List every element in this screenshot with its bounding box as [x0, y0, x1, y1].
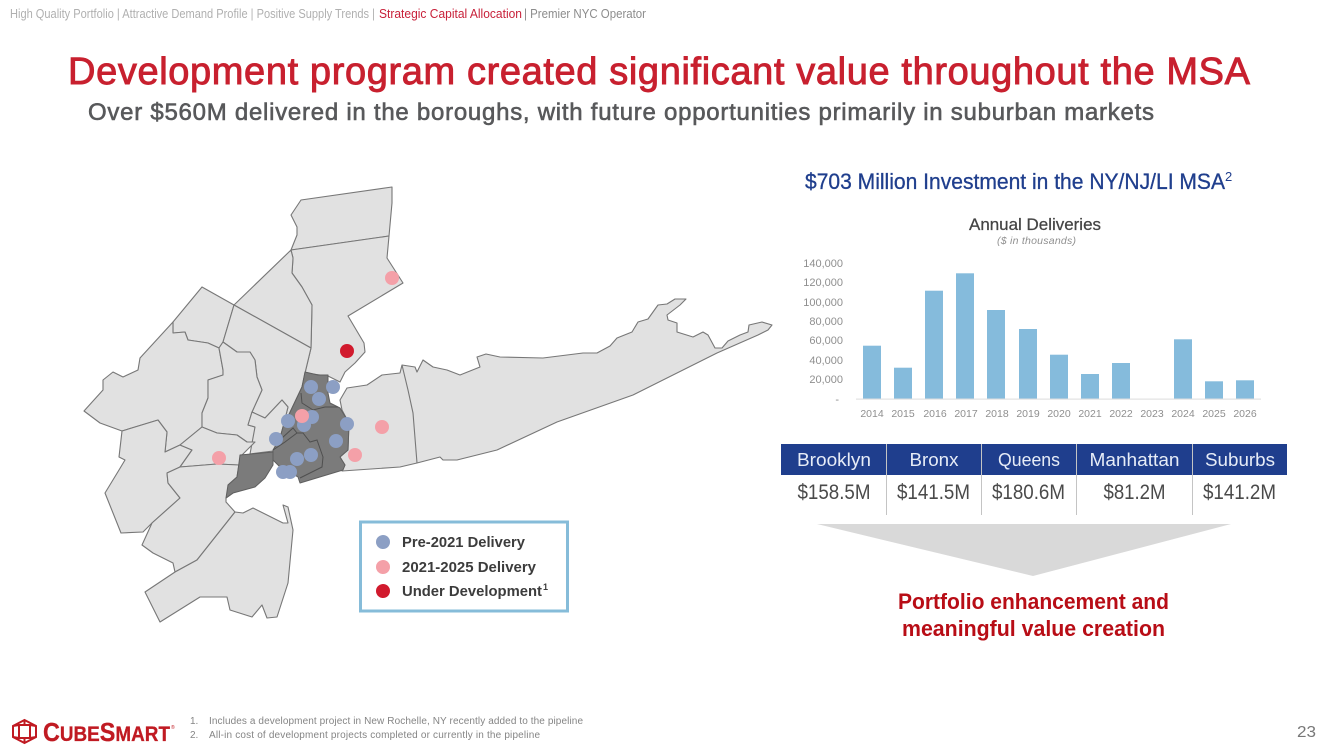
borough investment table: $141.5M: [897, 481, 970, 504]
footnotes: All-in cost of development projects completed or currently in the pipeline: [209, 730, 540, 741]
bar chart: annual deliveries: 2014: [860, 408, 884, 420]
borough investment table: [781, 444, 1287, 515]
legend: Pre-2021 Delivery: [402, 535, 525, 551]
map: 2021-2025 delivery markers: [212, 271, 399, 465]
conclusion callout: [898, 589, 1169, 641]
conclusion callout: Portfolio enhancement and: [898, 589, 1169, 614]
map: pre-2021 delivery markers: [269, 380, 354, 479]
header navigation: High Quality Portfolio | Attractive Demand Profile | Positive Supply Trends |: [10, 7, 375, 21]
subtitle: Over $560M delivered in the boroughs, with future opportunities primarily in suburban markets: [88, 99, 1154, 126]
investment heading: 2: [1225, 169, 1232, 184]
bar chart: annual deliveries: 2019: [1016, 408, 1040, 420]
bar chart: annual deliveries: 2017: [954, 408, 978, 420]
title: Development program created significant value throughout the MSA: [68, 51, 1251, 93]
footnotes: Includes a development project in New Rochelle, NY recently added to the pipeline: [209, 716, 583, 727]
chart title: ($ in thousands): [997, 235, 1076, 247]
bar chart: annual deliveries: 2016: [923, 408, 947, 420]
footnotes: [190, 716, 583, 741]
footnotes: 1.: [190, 716, 198, 727]
bar chart: annual deliveries: 2018: [985, 408, 1009, 420]
borough investment table: Manhattan: [1090, 450, 1180, 470]
borough investment table: Suburbs: [1205, 450, 1275, 470]
logo: CubeSmart: ®: [171, 724, 175, 731]
bar chart: annual deliveries: 80,000: [809, 316, 843, 328]
footnotes: 2.: [190, 730, 198, 741]
bar chart: annual deliveries: 2023: [1140, 408, 1164, 420]
header navigation: Strategic Capital Allocation: [379, 7, 522, 21]
bar chart: annual deliveries: 2022: [1109, 408, 1133, 420]
map: under development marker: [340, 344, 354, 358]
conclusion callout: meaningful value creation: [902, 616, 1165, 641]
chart title: [969, 216, 1101, 247]
bar chart: annual deliveries: -: [835, 394, 839, 406]
bar chart: annual deliveries: 20,000: [809, 374, 843, 386]
borough investment table: $141.2M: [1203, 481, 1276, 504]
bar chart: annual deliveries: 2015: [891, 408, 915, 420]
borough investment table: $180.6M: [992, 481, 1065, 504]
legend: Under Development: [402, 584, 542, 600]
borough investment table: Bronx: [910, 450, 958, 470]
bar chart: annual deliveries: 2026: [1233, 408, 1257, 420]
chart title: Annual Deliveries: [969, 216, 1101, 234]
legend: 1: [543, 582, 548, 592]
bar chart: annual deliveries: 60,000: [809, 335, 843, 347]
bar chart: annual deliveries: 2025: [1202, 408, 1226, 420]
borough investment table: $158.5M: [798, 481, 870, 504]
bar chart: annual deliveries: 140,000: [803, 258, 843, 270]
bar chart: annual deliveries: 2024: [1171, 408, 1195, 420]
legend: [360, 522, 568, 611]
borough investment table: Brooklyn: [797, 450, 871, 470]
logo: CubeSmart: CUBESMART: [43, 717, 170, 747]
header navigation: [10, 7, 646, 21]
bar chart: annual deliveries: 2021: [1078, 408, 1102, 420]
map: NY/NJ/LI counties: [84, 187, 772, 622]
header navigation: | Premier NYC Operator: [524, 7, 646, 21]
borough investment table: Queens: [998, 450, 1060, 470]
borough investment table: $81.2M: [1104, 481, 1166, 504]
investment heading: $703 Million Investment in the NY/NJ/LI MSA: [805, 169, 1225, 194]
bar chart: annual deliveries: 40,000: [809, 355, 843, 367]
arrow: downward chevron: [817, 524, 1231, 576]
bar chart: annual deliveries: 2020: [1047, 408, 1071, 420]
page number: 23: [1297, 724, 1316, 741]
bar chart: annual deliveries: [803, 258, 1261, 420]
bar chart: annual deliveries: 100,000: [803, 297, 843, 309]
bar chart: annual deliveries: 120,000: [803, 277, 843, 289]
legend: 2021-2025 Delivery: [402, 560, 536, 576]
